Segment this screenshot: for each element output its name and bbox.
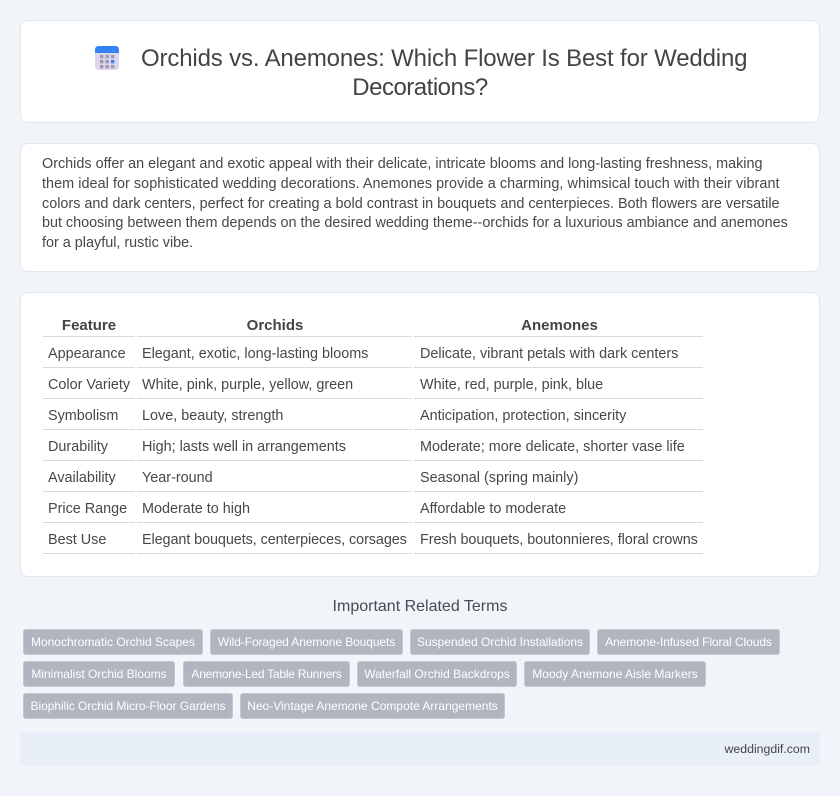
- footer source text: weddingdif.com: [725, 742, 810, 756]
- row: color variety: White, red, purple, pink, blue: [420, 377, 603, 393]
- related term tags: Anemone-Infused Floral Clouds: [605, 635, 772, 649]
- row: availability: [48, 470, 578, 486]
- related term tags: Moody Anemone Aisle Markers: [532, 667, 698, 681]
- intro text: [42, 156, 788, 251]
- intro text: for a playful, rustic vibe.: [42, 235, 193, 251]
- row: color variety: [48, 377, 603, 393]
- related term tags: Anemone-Led Table Runners: [191, 667, 342, 681]
- header panel: [20, 20, 820, 123]
- title: [141, 45, 747, 101]
- related term tags: Minimalist Orchid Blooms: [31, 667, 167, 681]
- row: price range: Price Range: [48, 501, 127, 517]
- related terms heading: Important Related Terms: [333, 598, 507, 615]
- row: appearance: [48, 346, 678, 362]
- row: availability: Year-round: [142, 470, 213, 486]
- row: color variety: White, pink, purple, yellow, green: [142, 377, 353, 393]
- related term tags: Wild-Foraged Anemone Bouquets: [218, 635, 395, 649]
- table header row: Anemones: [521, 317, 598, 334]
- table header row: [62, 317, 598, 334]
- related term tags: [23, 629, 780, 719]
- title: Decorations?: [352, 74, 488, 101]
- row: durability: Durability: [48, 439, 108, 455]
- footer bar: [20, 732, 820, 766]
- row: best use: Best Use: [48, 532, 106, 548]
- row: symbolism: Symbolism: [48, 408, 118, 424]
- related term tags: Biophilic Orchid Micro-Floor Gardens: [31, 699, 225, 713]
- row: price range: [48, 501, 566, 517]
- table header row: Orchids: [247, 317, 303, 334]
- intro text: colors and dark centers, perfect for creating a bold contrast in bouquets and centerpieces. Both flowers are versatile: [42, 196, 780, 212]
- row: symbolism: Anticipation, protection, sincerity: [420, 408, 626, 424]
- row: symbolism: [48, 408, 626, 424]
- row: appearance: Delicate, vibrant petals with dark centers: [420, 346, 678, 362]
- row: availability: Availability: [48, 470, 116, 486]
- row: durability: High; lasts well in arrangements: [142, 439, 346, 455]
- row: best use: [48, 532, 698, 548]
- row: durability: Moderate; more delicate, shorter vase life: [420, 439, 685, 455]
- row: appearance: Appearance: [48, 346, 126, 362]
- row: appearance: Elegant, exotic, long-lasting blooms: [142, 346, 368, 362]
- intro text: but choosing between them depends on the desired wedding theme--orchids for a luxurious ambiance and anemones: [42, 215, 788, 231]
- row: durability: [48, 439, 685, 455]
- title: Orchids vs. Anemones: Which Flower Is Best for Wedding: [141, 45, 747, 72]
- row: best use: Elegant bouquets, centerpieces, corsages: [142, 532, 407, 548]
- related term tags: Waterfall Orchid Backdrops: [364, 667, 510, 681]
- intro text: Orchids offer an elegant and exotic appeal with their delicate, intricate blooms and long-lasting freshness, making: [42, 156, 762, 172]
- row: color variety: Color Variety: [48, 377, 130, 393]
- row: symbolism: Love, beauty, strength: [142, 408, 283, 424]
- related term tags: Monochromatic Orchid Scapes: [31, 635, 195, 649]
- related term tags: Neo-Vintage Anemone Compote Arrangements: [247, 699, 498, 713]
- intro text: them ideal for sophisticated wedding decorations. Anemones provide a charming, whimsical touch with their vibrant: [42, 176, 780, 192]
- related term tags: Suspended Orchid Installations: [417, 635, 583, 649]
- comparison table panel: [20, 292, 820, 577]
- row: availability: Seasonal (spring mainly): [420, 470, 578, 486]
- row: price range: Moderate to high: [142, 501, 250, 517]
- row: price range: Affordable to moderate: [420, 501, 566, 517]
- icon: calendar: [95, 46, 119, 70]
- table header row: Feature: [62, 317, 116, 334]
- intro paragraph panel: [20, 143, 820, 272]
- row: best use: Fresh bouquets, boutonnieres, floral crowns: [420, 532, 698, 548]
